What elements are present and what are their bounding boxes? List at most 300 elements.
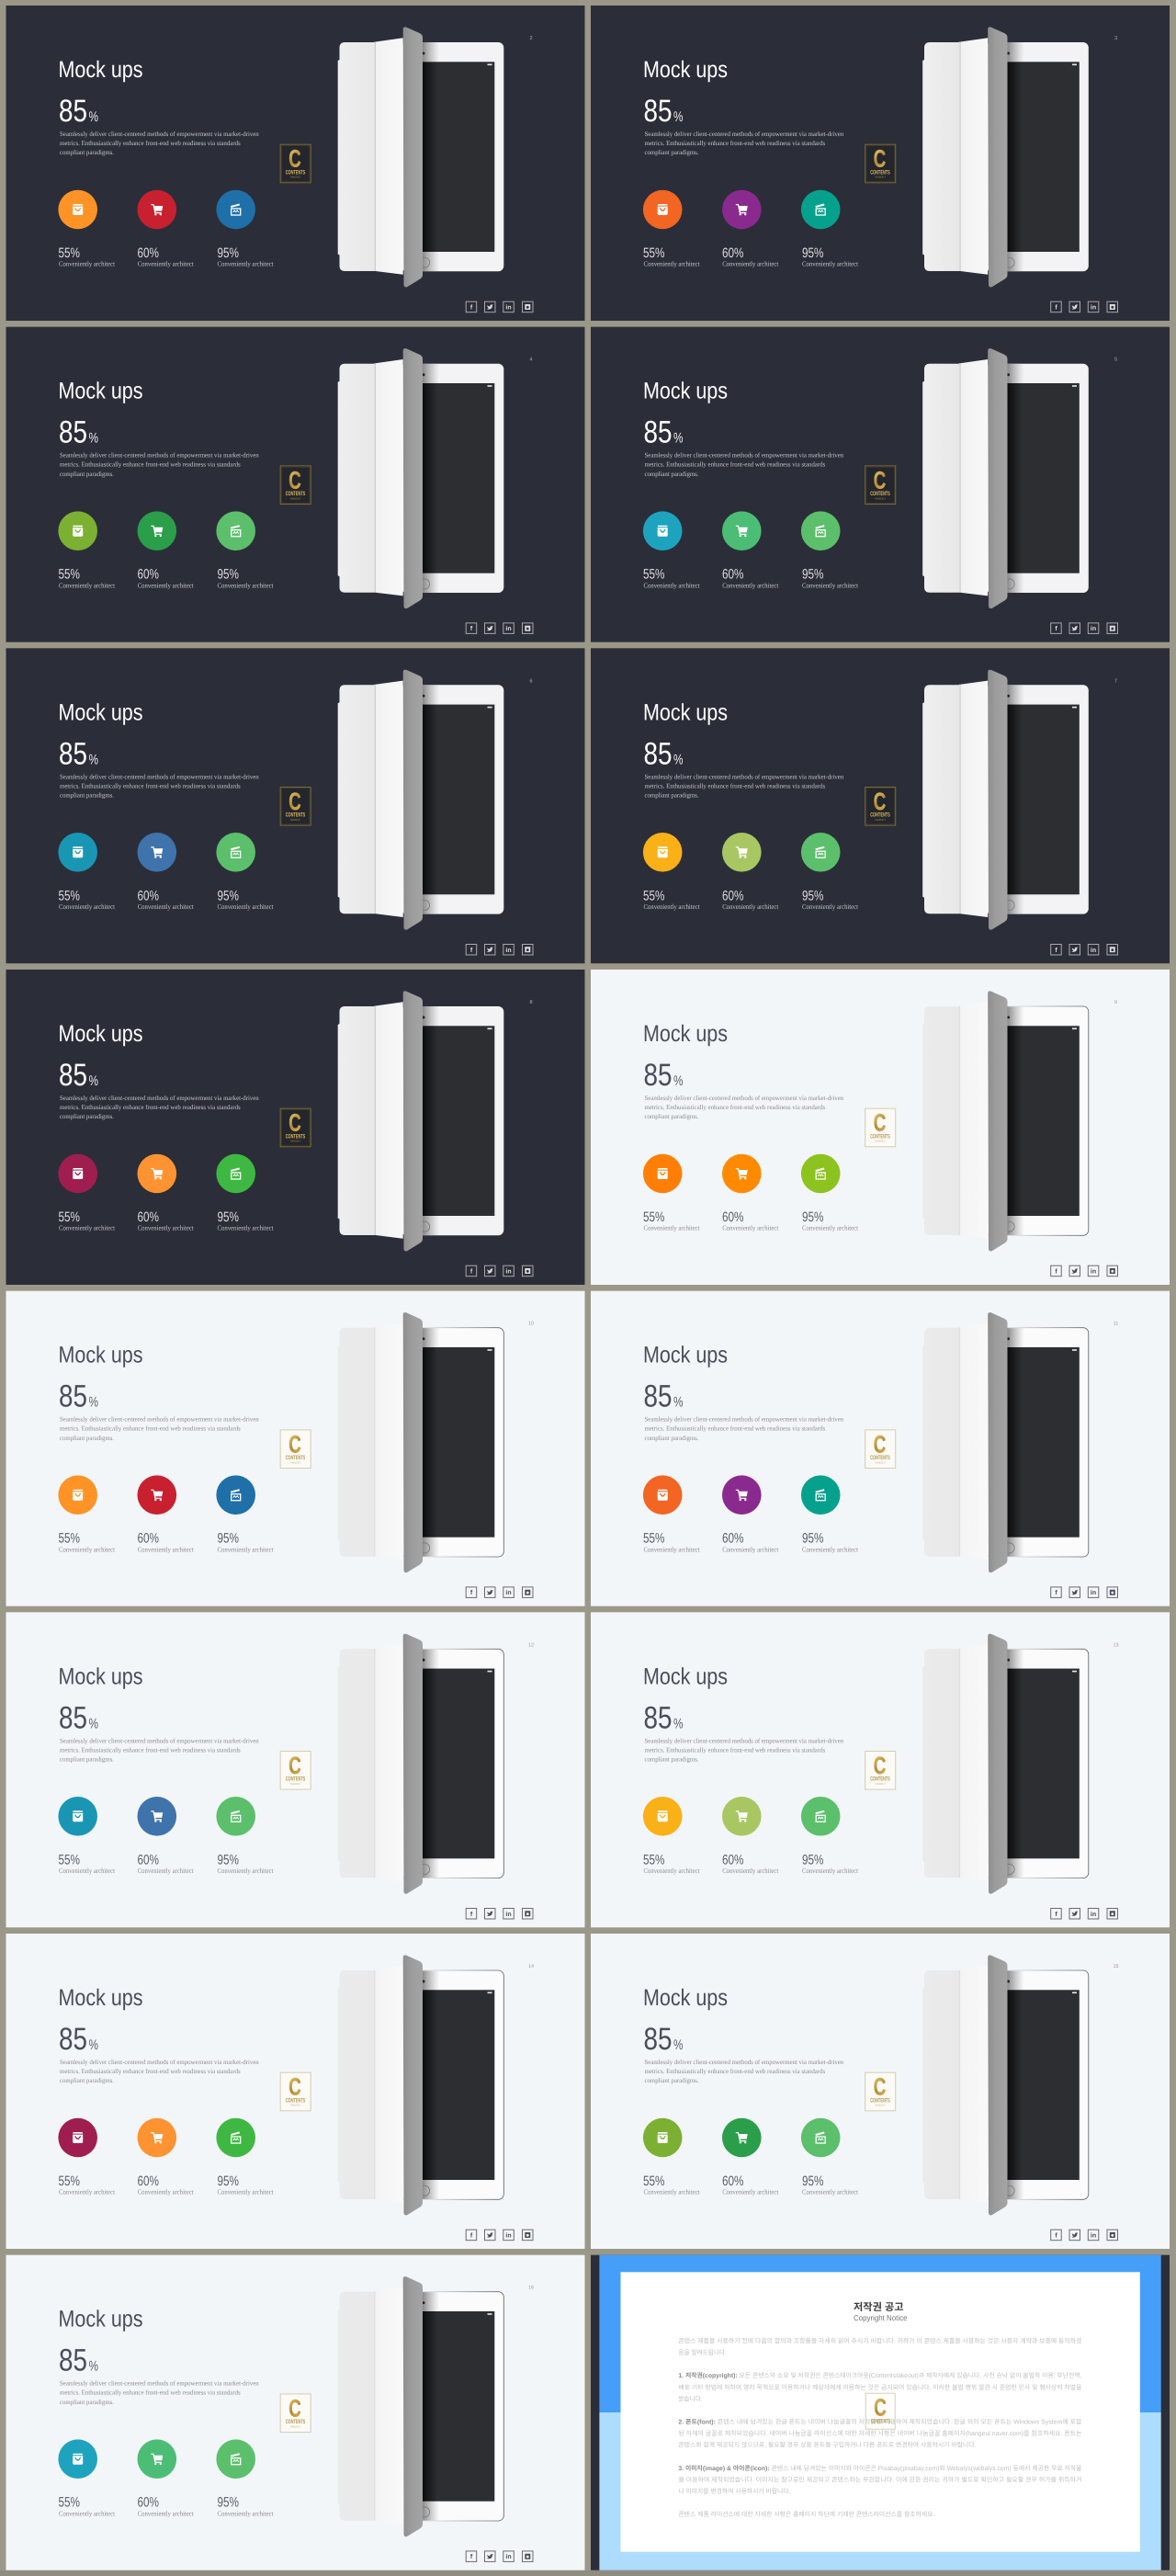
notice section 2 (678, 2419, 1082, 2448)
badge: TAKEOUT (290, 176, 301, 179)
notice section 2: 2. 폰트(font): 콘텐스 내에 담겨있는 한글 폰트는 네이버 나눔글꼴의 저작물을 이용하여 제작되었습니다. 한글 외의 모든 폰트는 Windows System에 포함 (678, 2419, 1082, 2426)
badge: C (288, 1109, 301, 1137)
body text: Seamlessly deliver client-centered methods of empowerment via market-driven (60, 773, 259, 780)
badge: TAKEOUT (290, 1782, 301, 1786)
tablet mockup (338, 991, 503, 1251)
badge (280, 1752, 311, 1789)
stat: 55% (58, 1475, 116, 1553)
badge: TAKEOUT (875, 176, 886, 179)
stat: 60%: Conveniently architect (138, 902, 194, 911)
big stat 85%: % (88, 109, 98, 125)
stat: 95%: Conveniently architect (217, 260, 274, 268)
stat: 55% (643, 833, 700, 911)
stat: 60% (138, 2439, 194, 2517)
stat: 60%: Conveniently architect (138, 2188, 194, 2196)
stat: 55%: 55% (59, 567, 80, 583)
big stat 85%: % (673, 752, 684, 767)
big stat 85%: 85 (59, 94, 87, 129)
notice section 3 (678, 2465, 1081, 2495)
stat: 95% (801, 833, 859, 911)
badge: CONTENTS (870, 1455, 890, 1461)
stat: 55%: Conveniently architect (59, 260, 116, 268)
body text: compliant paradigms. (645, 2077, 699, 2084)
stat: 60%: Conveniently architect (138, 1545, 194, 1553)
stat: 95% (216, 2439, 274, 2517)
stat: 55%: Conveniently architect (59, 1545, 116, 1553)
social icons (466, 945, 533, 955)
body text (645, 2059, 844, 2084)
badge: TAKEOUT (290, 2104, 301, 2107)
page number: 4 (529, 357, 533, 363)
body text: metrics. Enthusiastically enhance front-end web readiness via standards (645, 1104, 825, 1111)
title: Mock ups (643, 1663, 728, 1689)
stat: 95%: Conveniently architect (802, 581, 859, 589)
badge on notice (865, 2393, 895, 2429)
body text: metrics. Enthusiastically enhance front-end web readiness via standards (60, 2068, 241, 2075)
badge on notice: C (874, 2394, 887, 2422)
stat: 95% (216, 2118, 274, 2196)
badge: C (288, 145, 301, 173)
tablet mockup (338, 1955, 503, 2215)
stat: 55%: Conveniently architect (643, 581, 700, 589)
page number: 15 (1113, 1964, 1119, 1969)
stat: 55%: 55% (643, 567, 665, 583)
social icons: in (1091, 1268, 1096, 1276)
stat: 60% (138, 190, 194, 268)
stat: 95% (216, 190, 274, 268)
page number: 12 (528, 1642, 534, 1648)
stat: 60%: 60% (138, 1852, 159, 1867)
stat: 55%: 55% (643, 2173, 665, 2189)
stat: 95%: Conveniently architect (217, 1867, 274, 1875)
body text: compliant paradigms. (60, 2399, 114, 2406)
stat: 55%: Conveniently architect (643, 1545, 700, 1553)
badge: TAKEOUT (875, 1140, 886, 1143)
body text: Seamlessly deliver client-centered methods of empowerment via market-driven (60, 1737, 259, 1744)
badge (280, 787, 311, 825)
stat: 55%: 55% (59, 888, 80, 903)
big stat 85%: 85 (59, 2343, 87, 2378)
social icons: in (505, 303, 512, 311)
panel: slide 6 dark (6, 648, 584, 963)
tablet mockup (338, 1312, 503, 1572)
stat: 95% (216, 833, 274, 911)
stat: 95% (801, 1797, 859, 1875)
panel: slide 10 light (6, 1291, 584, 1606)
social icons: f (1055, 303, 1057, 311)
stat: 95%: 95% (802, 1209, 823, 1225)
badge: TAKEOUT (290, 818, 301, 822)
tablet mockup (338, 1634, 503, 1894)
stat: 95%: Conveniently architect (802, 902, 859, 911)
stat: 60% (722, 511, 779, 589)
badge (865, 144, 896, 183)
panel: slide 9 light (591, 970, 1170, 1285)
stat: 95%: 95% (217, 888, 239, 903)
badge: TAKEOUT (875, 818, 886, 822)
body text: Seamlessly deliver client-centered methods of empowerment via market-driven (645, 131, 844, 138)
badge (865, 1430, 896, 1469)
tablet mockup (338, 670, 503, 930)
tablet mockup (922, 1312, 1089, 1572)
stat: 60%: Conveniently architect (722, 1224, 779, 1232)
stat: 60% (138, 833, 194, 911)
big stat 85%: % (88, 2037, 98, 2053)
stat: 55% (58, 190, 116, 268)
stat: 95%: Conveniently architect (217, 581, 274, 589)
stat: 95%: 95% (802, 1531, 823, 1547)
badge: TAKEOUT (875, 496, 886, 500)
stat: 55%: Conveniently architect (643, 1224, 700, 1232)
stat: 60%: Conveniently architect (138, 581, 194, 589)
badge: C (874, 1109, 886, 1137)
badge (280, 466, 311, 504)
social icons: in (505, 947, 512, 954)
panel: slide 11 light (591, 1291, 1170, 1606)
body text: compliant paradigms. (60, 1113, 114, 1120)
stat: 95%: 95% (802, 2173, 823, 2189)
stat: 60%: Conveniently architect (138, 1867, 194, 1875)
stat: 60% (722, 190, 779, 268)
body text (645, 452, 844, 478)
body text: metrics. Enthusiastically enhance front-end web readiness via standards (60, 1104, 241, 1111)
page number: 13 (1113, 1642, 1119, 1648)
big stat 85%: % (673, 1073, 684, 1089)
stat: 55%: 55% (59, 1209, 80, 1225)
notice section 1: 받습니다. (678, 2395, 702, 2402)
title: Mock ups (643, 379, 728, 404)
stat: 60% (722, 1154, 779, 1232)
big stat 85%: % (88, 1395, 98, 1411)
stat: 60%: 60% (722, 567, 744, 583)
big stat 85%: 85 (643, 94, 673, 129)
body text: Seamlessly deliver client-centered methods of empowerment via market-driven (60, 1416, 259, 1424)
badge: C (288, 1430, 301, 1458)
title: Mock ups (643, 1021, 728, 1047)
stat: 95% (216, 511, 274, 589)
body text: metrics. Enthusiastically enhance front-end web readiness via standards (645, 1425, 825, 1433)
badge: TAKEOUT (875, 1782, 886, 1786)
stat: 55% (58, 833, 116, 911)
badge on notice: CONTENTS (871, 2418, 891, 2424)
panel: slide 8 dark (6, 970, 584, 1285)
social icons (1051, 301, 1117, 312)
big stat 85%: % (673, 431, 684, 447)
stat: 60% (138, 1475, 194, 1553)
stat: 60%: Conveniently architect (138, 260, 194, 268)
social icons: f (1055, 625, 1057, 632)
big stat 85%: % (88, 1073, 98, 1089)
big stat 85%: 85 (643, 736, 673, 771)
social icons: f (470, 2231, 473, 2239)
title: Mock ups (643, 1343, 728, 1368)
page number: 14 (528, 1964, 534, 1969)
stat: 95%: Conveniently architect (217, 2188, 274, 2196)
stat: 95%: Conveniently architect (217, 902, 274, 911)
page number: 16 (528, 2286, 534, 2291)
social icons (1051, 1908, 1117, 1919)
social icons: f (470, 625, 473, 632)
stat: 95%: Conveniently architect (802, 260, 859, 268)
stat: 55%: 55% (643, 888, 665, 903)
stat: 55%: Conveniently architect (59, 1867, 116, 1875)
body text: Seamlessly deliver client-centered methods of empowerment via market-driven (60, 2380, 259, 2388)
big stat 85%: 85 (643, 1058, 673, 1093)
notice intro: 콘텐스 제품을 사용하기 전에 다음의 합의과 조항들을 자세히 읽어 주시기 바랍니다. 귀하가 이 콘텐스 제품을 사용하는 것은 사용자 계약과 보증에 동의하셨 (678, 2338, 1082, 2345)
badge (280, 2394, 311, 2432)
social icons: f (1055, 947, 1057, 954)
big stat 85%: % (88, 431, 98, 447)
body text: Seamlessly deliver client-centered methods of empowerment via market-driven (645, 773, 844, 780)
stat: 95%: 95% (217, 2173, 239, 2189)
body text (60, 1416, 259, 1442)
stat: 55% (58, 1797, 116, 1875)
badge: C (288, 466, 301, 494)
big stat 85%: 85 (59, 1058, 87, 1093)
badge (280, 2072, 311, 2111)
social icons: in (505, 1589, 512, 1596)
stat: 60%: Conveniently architect (722, 1867, 779, 1875)
stat: 60% (722, 2118, 779, 2196)
stat: 55% (643, 2118, 700, 2196)
page number: 5 (1114, 357, 1117, 363)
badge: CONTENTS (286, 812, 306, 819)
stat: 55%: 55% (643, 245, 665, 261)
title: Mock ups (59, 57, 143, 83)
big stat 85%: % (88, 752, 98, 767)
badge: CONTENTS (870, 1133, 890, 1140)
stat: 95%: 95% (217, 567, 239, 583)
body text: compliant paradigms. (60, 471, 114, 478)
stat: 95%: Conveniently architect (217, 1224, 274, 1232)
body text (60, 131, 259, 156)
body text: metrics. Enthusiastically enhance front-end web readiness via standards (645, 1746, 825, 1753)
stat: 55%: 55% (59, 2173, 80, 2189)
social icons (1051, 945, 1117, 955)
badge: CONTENTS (286, 169, 306, 176)
stat: 55%: Conveniently architect (59, 1224, 116, 1232)
stat: 95%: Conveniently architect (802, 1545, 859, 1553)
badge: CONTENTS (286, 1455, 306, 1461)
stat: 55% (58, 511, 116, 589)
badge (865, 787, 896, 825)
body text (60, 1095, 259, 1120)
stat: 60%: 60% (138, 1531, 159, 1547)
notice subheading: Copyright Notice (854, 2313, 908, 2322)
stat: 60%: 60% (722, 888, 744, 903)
social icons: f (470, 1911, 473, 1918)
panel: slide 5 dark (591, 327, 1170, 642)
social icons: in (1091, 2231, 1096, 2239)
badge (865, 2072, 896, 2111)
stat: 95%: 95% (802, 245, 823, 261)
social icons (466, 1265, 533, 1277)
badge: C (874, 466, 886, 494)
stat: 95%: 95% (802, 1852, 823, 1867)
stat: 95%: 95% (217, 2495, 239, 2511)
body text (60, 2380, 259, 2406)
body text: Seamlessly deliver client-centered methods of empowerment via market-driven (645, 2059, 844, 2066)
tablet mockup (922, 1955, 1089, 2215)
title: Mock ups (59, 1985, 143, 2011)
social icons: f (470, 947, 473, 954)
tablet mockup (922, 348, 1089, 608)
big stat 85%: 85 (643, 1379, 673, 1414)
stat: 55%: Conveniently architect (643, 1867, 700, 1875)
social icons: f (1055, 1589, 1057, 1596)
badge: C (288, 2073, 301, 2101)
badge: CONTENTS (286, 491, 306, 497)
social icons: f (470, 1268, 473, 1276)
stat: 95% (216, 1797, 274, 1875)
stat: 60%: 60% (138, 888, 159, 903)
panel: slide 4 dark (6, 327, 584, 642)
stat: 60% (722, 833, 779, 911)
badge: TAKEOUT (875, 1460, 886, 1464)
social icons (1051, 1265, 1117, 1277)
body text: compliant paradigms. (645, 1756, 699, 1764)
stat: 55%: Conveniently architect (59, 902, 116, 911)
stat: 60%: Conveniently architect (722, 1545, 779, 1553)
body text: Seamlessly deliver client-centered methods of empowerment via market-driven (60, 1095, 259, 1102)
badge: C (288, 788, 301, 815)
stat: 55% (643, 1797, 700, 1875)
big stat 85%: 85 (643, 415, 673, 450)
body text: Seamlessly deliver client-centered methods of empowerment via market-driven (645, 1095, 844, 1102)
stat: 55% (58, 2118, 116, 2196)
tablet mockup (338, 27, 503, 287)
stat: 95% (216, 1475, 274, 1553)
stat: 95% (801, 511, 859, 589)
stat: 95% (801, 1475, 859, 1553)
social icons: in (505, 2231, 512, 2239)
big stat 85%: 85 (59, 2022, 87, 2057)
stat: 55% (643, 1475, 700, 1553)
social icons (1051, 623, 1117, 633)
badge: C (874, 145, 886, 173)
stat: 60%: Conveniently architect (138, 1224, 194, 1232)
body text: metrics. Enthusiastically enhance front-end web readiness via standards (60, 140, 241, 147)
body text: metrics. Enthusiastically enhance front-end web readiness via standards (645, 461, 825, 469)
notice section 3: 나 이미지를 변경하여 사용하시기 바랍니다. (678, 2488, 790, 2495)
social icons (466, 623, 533, 633)
panel: slide 16 light (6, 2255, 584, 2570)
notice section 3: 3. 이미지(image) & 아이콘(icon): 콘텐스 내에 담겨있는 이미지와 아이콘은 Pixabay(pixabay.com)와 Webalys(webalys.com) 등에서 제공한 무료 저작물 (678, 2465, 1081, 2472)
notice intro (678, 2338, 1082, 2356)
stat: 55%: Conveniently architect (59, 2509, 116, 2517)
stat: 95%: Conveniently architect (217, 1545, 274, 1553)
panel: slide 2 dark (6, 6, 584, 321)
tablet mockup (338, 348, 503, 608)
badge: C (874, 1430, 886, 1458)
tablet mockup (922, 670, 1089, 930)
stat: 60%: 60% (138, 1209, 159, 1225)
badge (865, 466, 896, 504)
social icons: in (505, 1268, 512, 1276)
stat: 55%: 55% (643, 1531, 665, 1547)
stat: 95%: Conveniently architect (802, 2188, 859, 2196)
tablet mockup (338, 2276, 503, 2536)
body text: compliant paradigms. (60, 2077, 114, 2084)
notice heading: 저작권 공고 (854, 2301, 904, 2313)
social icons: in (1091, 947, 1096, 954)
body text: compliant paradigms. (60, 791, 114, 799)
body text: Seamlessly deliver client-centered methods of empowerment via market-driven (645, 452, 844, 460)
body text (60, 773, 259, 800)
badge: C (288, 2394, 301, 2422)
big stat 85%: 85 (59, 1700, 87, 1735)
stat: 55% (58, 1154, 116, 1232)
badge (280, 1108, 311, 1147)
stat: 60%: 60% (138, 2495, 159, 2511)
stat: 55%: Conveniently architect (59, 2188, 116, 2196)
stat: 60%: 60% (722, 245, 744, 261)
badge: CONTENTS (870, 812, 890, 819)
page number: 9 (1114, 1000, 1117, 1005)
stat: 60% (138, 2118, 194, 2196)
body text: Seamlessly deliver client-centered methods of empowerment via market-driven (645, 1416, 844, 1424)
page number: 10 (528, 1322, 534, 1327)
stat: 60%: 60% (138, 567, 159, 583)
panel: slide 15 light (591, 1934, 1170, 2249)
badge: CONTENTS (870, 2097, 890, 2104)
body text (645, 1095, 844, 1120)
notice section 2: 된 자체의 글꼴로 제작되었습니다. 네이버 나눔글꼴 라이선스에 대한 자세한 사항은 네이버 나눔글꼴 홈페이지(hangeul.naver.com)를 참조하세요. 폰트는 (678, 2430, 1081, 2437)
stat: 60%: 60% (722, 2173, 744, 2189)
social icons (1051, 2230, 1117, 2241)
body text: metrics. Enthusiastically enhance front-end web readiness via standards (645, 782, 825, 789)
badge: C (874, 1752, 886, 1779)
social icons: f (1055, 1268, 1057, 1276)
big stat 85%: 85 (59, 1379, 87, 1414)
badge: CONTENTS (286, 1133, 306, 1140)
stat: 55% (643, 190, 700, 268)
body text: compliant paradigms. (645, 1113, 699, 1120)
stat: 55% (643, 1154, 700, 1232)
body text (645, 131, 844, 156)
big stat 85%: % (673, 1395, 684, 1411)
social icons: in (1091, 1589, 1096, 1596)
social icons: in (505, 625, 512, 632)
notice section 1 (678, 2372, 1081, 2402)
stat: 95%: 95% (217, 1852, 239, 1867)
badge: TAKEOUT (290, 2424, 301, 2428)
body text: compliant paradigms. (60, 1435, 114, 1442)
title: Mock ups (59, 1663, 143, 1689)
stat: 95%: Conveniently architect (217, 2509, 274, 2517)
stat: 60%: 60% (138, 2173, 159, 2189)
stat: 60%: Conveniently architect (722, 2188, 779, 2196)
stat: 60% (722, 1797, 779, 1875)
stat: 95%: 95% (217, 245, 239, 261)
badge: CONTENTS (286, 1776, 306, 1783)
big stat 85%: 85 (59, 736, 87, 771)
big stat 85%: % (88, 1716, 98, 1731)
body text (60, 1737, 259, 1763)
badge: CONTENTS (286, 2097, 306, 2104)
badge (280, 144, 311, 183)
badge: C (874, 2073, 886, 2101)
stat: 95% (801, 2118, 859, 2196)
body text: compliant paradigms. (645, 1435, 699, 1442)
badge: CONTENTS (870, 169, 890, 176)
big stat 85%: 85 (59, 415, 87, 450)
social icons (466, 1587, 533, 1597)
stat: 55%: 55% (59, 2495, 80, 2511)
stat: 55%: 55% (59, 1531, 80, 1547)
badge (865, 1108, 896, 1147)
social icons (466, 301, 533, 312)
